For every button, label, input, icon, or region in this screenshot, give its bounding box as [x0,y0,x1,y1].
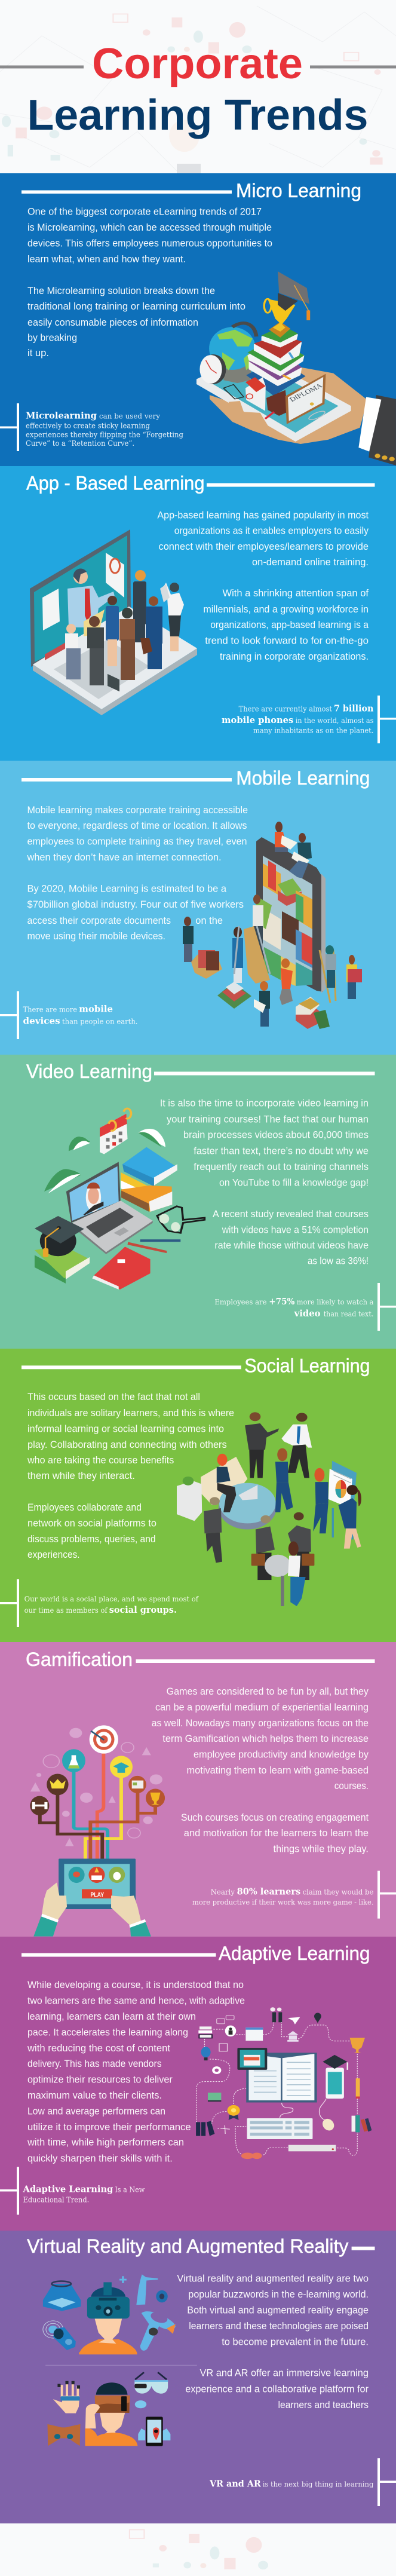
panel: Virtual Reality and Augmented Reality [0,2231,396,2523]
body text [27,1979,245,2164]
body text: learning, learners can learn at their own [27,2011,196,2022]
illustration: tablet game tree with icons [30,1725,165,1937]
callout: microlearning: experiences thereby flipping the “Forgetting [26,431,183,439]
heading: Virtual Reality and Augmented Reality: Virtual Reality and Augmented Reality [27,2235,348,2257]
body text: rate while those without videos have [214,1240,369,1251]
callout: more mobile devices: mobile [79,1004,113,1014]
body text: individuals are solitary learners, and this is where [27,1407,234,1419]
body text: frequently reach out to training channels [194,1161,369,1172]
body text: network on social platforms to [27,1517,156,1529]
body text: when they don’t have an internet connection. [27,851,221,863]
body text: your training courses! The fact that our human [167,1113,369,1125]
callout: 80% learners: more productive if their work was more game - like. [192,1898,373,1906]
title rule left [0,66,84,68]
callout: 7 billion mobile phones: in the world, almost as [296,716,373,725]
body text: easily consumable pieces of information [27,317,198,328]
illustration: laptop with video, books, cap and calendar [35,1108,204,1289]
body text: by breaking [27,332,77,343]
body text: is Microlearning, which can be accessed through multiple [27,222,272,233]
title: Learning Trends: Learning Trends [27,91,368,139]
callout: 7 billion mobile phones [222,696,396,743]
callout: social groups: our time as members of [24,1606,108,1615]
illustration: phone as a bookshelf with readers [183,822,362,1029]
body text: to everyone, regardless of time or location. It allows [27,820,247,831]
callout: 7 billion mobile phones: There are currently almost [239,705,332,713]
callout: employees +75%: Employees are [214,1298,266,1306]
body text: it up. [27,347,49,359]
body text: App-based learning has gained popularity in most [157,510,369,521]
heading: Social Learning: Social Learning [244,1355,370,1377]
illustration: people standing on a giant laptop [30,529,197,715]
body text [27,206,272,359]
callout: social groups: Our world is a social place, and we spend most of [24,1595,199,1603]
heading: Mobile Learning [22,767,370,789]
body text: It is also the time to incorporate video learning in [160,1098,369,1109]
panel: Micro Learning [0,173,396,466]
callout: 80% learners [192,1871,396,1919]
body text: popular buzzwords in the e-learning world. [188,2289,369,2300]
callout: microlearning: Microlearning [26,411,97,421]
callout: more mobile devices: There are more [23,1005,77,1013]
callout: 80% learners: claim they would be [303,1888,373,1897]
heading: Micro Learning: Micro Learning [236,180,361,201]
panel: Video Learning [0,1055,396,1349]
body text [27,1391,234,1560]
heading: Video Learning: Video Learning [26,1061,152,1082]
heading: Adaptive Learning [22,1943,370,1964]
body text: play. Collaborating and connecting with others [27,1439,227,1450]
body text: two learners are the same and hence, with adaptive [27,1995,245,2007]
callout: adaptive learning trend: Adaptive Learning [22,2185,113,2195]
heading: Video Learning [26,1061,375,1082]
illustration: open book, devices and learning path [196,2007,372,2159]
body text: Such courses focus on creating engagement [181,1812,369,1823]
body text: move using their mobile devices. [27,930,165,942]
body text: motivating them to learn with game-based [186,1765,369,1776]
body text: term Gamification which helps them to increase [162,1733,369,1744]
body text: A recent study revealed that courses [213,1208,369,1220]
body text: By 2020, Mobile Learning is estimated to be a [27,883,227,895]
callout: VR and AR next big thing: is the next big thing in learning [263,2480,374,2489]
body text: VR and AR offer an immersive learning [199,2367,369,2379]
callout: 80% learners: Nearly [211,1888,235,1897]
body text: on-demand online training. [252,556,369,568]
body text: delivery. This has made vendors [27,2058,162,2069]
body text: Employees collaborate and [27,1502,142,1513]
body text [152,1686,369,1855]
callout: 7 billion mobile phones: many inhabitants as on the planet. [253,727,373,735]
body text: experiences. [27,1549,80,1560]
heading: Social Learning [22,1355,370,1377]
body text: learners and these technologies are poised [189,2320,369,2332]
body text [157,510,369,662]
body text: maximum value to their clients. [27,2090,162,2101]
body text: with time, while high performers can [27,2137,184,2148]
callout: more mobile devices: devices [23,1016,60,1027]
callout: adaptive learning trend [0,2167,145,2214]
panel: Adaptive Learning [0,1937,396,2231]
callout: microlearning: Curve” to a “Retention Curve”. [26,439,134,448]
heading: Adaptive Learning: Adaptive Learning [219,1943,370,1964]
body text: access their corporate documents [27,915,171,926]
callout: more mobile devices [0,991,137,1039]
callout: employees +75%: more likely to watch a [297,1298,373,1306]
body text: utilize it to improve their performance [27,2121,191,2133]
body text: faster than text, there’s no doubt why we [194,1145,369,1156]
illustration: hand holding phone with books, globe and trophy [197,271,396,465]
body text: on YouTube to fill a knowledge gap! [219,1177,369,1188]
callout: more mobile devices: than people on earth. [62,1018,137,1026]
callout: 7 billion mobile phones: mobile phones [222,715,293,725]
body text: employee productivity and knowledge by [194,1748,369,1760]
callout: adaptive learning trend: Is a New [115,2186,145,2194]
callout: VR and AR next big thing: VR and AR [209,2479,262,2489]
callout: 80% learners: 80% learners [237,1887,300,1897]
body text [160,1098,369,1267]
heading: Gamification: Gamification [26,1649,133,1670]
body text: learners and teachers [278,2399,369,2410]
body text: This occurs based on the fact that not all [27,1391,200,1402]
callout: employees +75%: +75% [269,1297,295,1307]
body text: Mobile learning makes corporate training accessible [27,804,248,816]
body text: organizations, app-based learning is a [210,619,369,630]
body text: experience and a collaborative platform for [185,2383,369,2394]
illustration: hand holding phone with books, globe and trophy: DIPLOMA [288,382,324,403]
body text: traditional long training or learning curriculum into [27,301,245,312]
callout: VR and AR next big thing [209,2458,396,2506]
title rule right [310,66,396,68]
body text: discuss problems, queries, and [27,1533,155,1545]
body text: them while they interact. [27,1470,135,1481]
heading: Micro Learning [22,180,361,201]
body text: things while they play. [274,1843,369,1855]
panel: footer [0,2523,396,2576]
body text: with videos have a 51% completion [222,1224,369,1235]
body text: learn what, when and how they want. [27,253,186,265]
callout: social groups [0,1579,199,1627]
body text: millennials, and a growing workforce in [203,604,369,615]
callout: microlearning [0,403,183,451]
body text: who are taking the course benefits [27,1454,174,1466]
callout: employees +75% [214,1283,396,1331]
panel: header [0,0,396,173]
body text: With a shrinking attention span of [222,587,369,599]
body text: as low as 36%! [308,1255,369,1267]
body text: brain processes videos about 60,000 times [183,1129,369,1141]
illustration: colleagues collaborating in an office [177,1412,361,1606]
panel: Gamification [0,1642,396,1937]
body text: trend to look forward to for on-the-go [205,635,369,647]
body text: with reducing the cost of content [27,2042,170,2054]
callout: employees +75%: video [294,1309,321,1319]
heading: App - Based Learning [26,473,375,494]
title: Corporate: Corporate [92,40,303,88]
panel: Social Learning [0,1349,396,1642]
callout: adaptive learning trend: Educational Trend. [23,2195,89,2204]
callout: microlearning: effectively to create sticky learning [26,422,150,430]
readers and climbers [183,822,362,1029]
callout: microlearning: can be used very [99,412,160,421]
callout: 7 billion mobile phones: 7 billion [334,704,374,713]
panel: Mobile Learning [0,761,396,1055]
callout: employees +75%: than read text. [324,1310,373,1318]
body text: informal learning or social learning comes into [27,1423,224,1434]
body text [27,804,248,942]
body text: to become prevalent in the future. [222,2336,369,2348]
heading: App - Based Learning: App - Based Learning [26,473,204,494]
body text: on the [195,915,223,926]
body text: Low and average performers can [27,2106,165,2117]
heading: Mobile Learning: Mobile Learning [236,767,370,789]
body text: pace. It accelerates the learning along [27,2026,188,2038]
body text: training in corporate organizations. [220,651,369,662]
body text: employees to complete training as they travel, even [27,836,247,847]
body text: as well. Nowadays many organizations focus on the [152,1717,369,1729]
heading: Gamification [26,1649,375,1670]
body text: organizations as it enables employers to easily [174,525,369,537]
body text: One of the biggest corporate eLearning trends of 2017 [27,206,262,218]
body text: optimize their resources to deliver [27,2073,173,2085]
body text: connect with their employees/learners to provide [159,541,369,552]
body text: $70billion global industry. Four out of five workers [27,899,244,910]
callout: social groups: social groups. [109,1605,177,1615]
body text: The Microlearning solution breaks down the [27,285,215,296]
body text: can be a powerful medium of experiential learning [155,1701,369,1713]
body text: Virtual reality and augmented reality are two [177,2272,369,2284]
body text: Games are considered to be fun by all, but they [167,1686,369,1697]
illustration: VR headset user and gadgets [43,2274,197,2446]
illustration: tablet game tree with icons: PLAY [90,1891,104,1898]
body text: courses. [334,1780,369,1791]
audience figures [65,570,184,691]
body text: quickly sharpen their skills with it. [27,2152,173,2164]
body text: and motivation for the learners to learn the [184,1827,369,1839]
body text: devices. This offers employees numerous opportunities to [27,238,272,249]
body text: Both virtual and augmented reality engage [187,2304,369,2316]
panel: App-Based Learning [0,466,396,761]
body text [177,2272,369,2410]
body text: While developing a course, it is understood that no [27,1979,244,1990]
